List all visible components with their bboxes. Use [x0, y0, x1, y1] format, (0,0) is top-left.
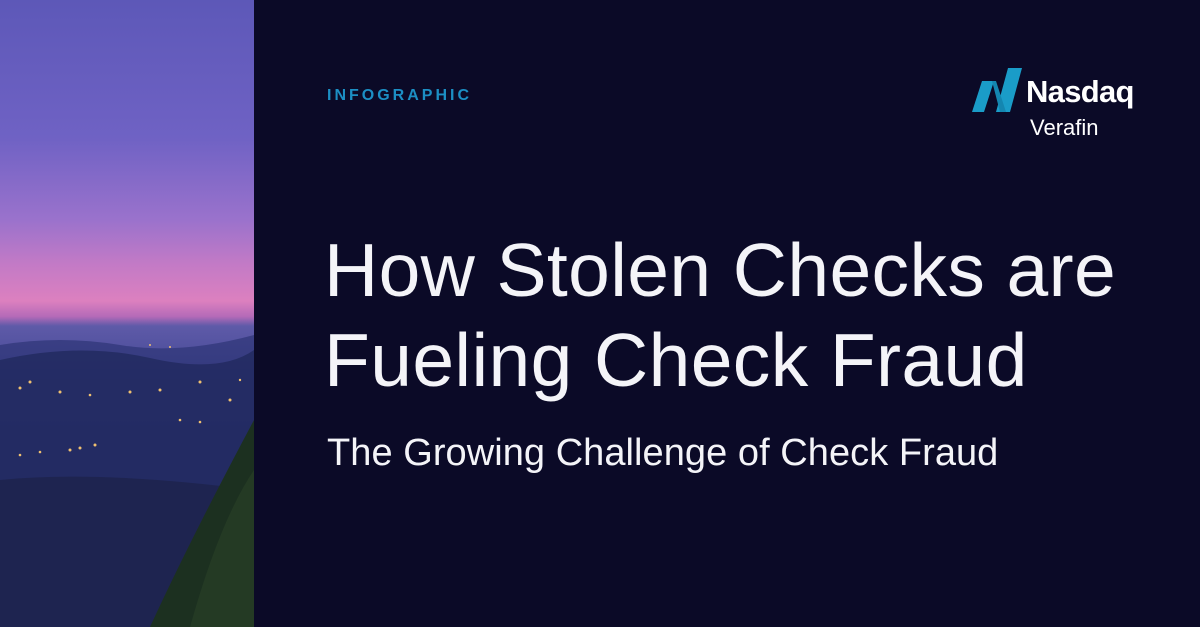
label: INFOGRAPHIC: INFOGRAPHIC — [327, 87, 472, 104]
title — [324, 228, 1116, 402]
photo: mountain dusk landscape — [0, 0, 254, 627]
title: How Stolen Checks are — [324, 228, 1116, 312]
subtitle: The Growing Challenge of Check Fraud — [327, 432, 998, 474]
icon: nasdaq mark — [972, 68, 1022, 112]
logo: Nasdaq Verafin — [972, 68, 1134, 140]
title: Fueling Check Fraud — [324, 318, 1028, 402]
logo: Nasdaq Verafin: Verafin — [1030, 115, 1098, 140]
logo: Nasdaq Verafin: Nasdaq — [1026, 74, 1134, 109]
